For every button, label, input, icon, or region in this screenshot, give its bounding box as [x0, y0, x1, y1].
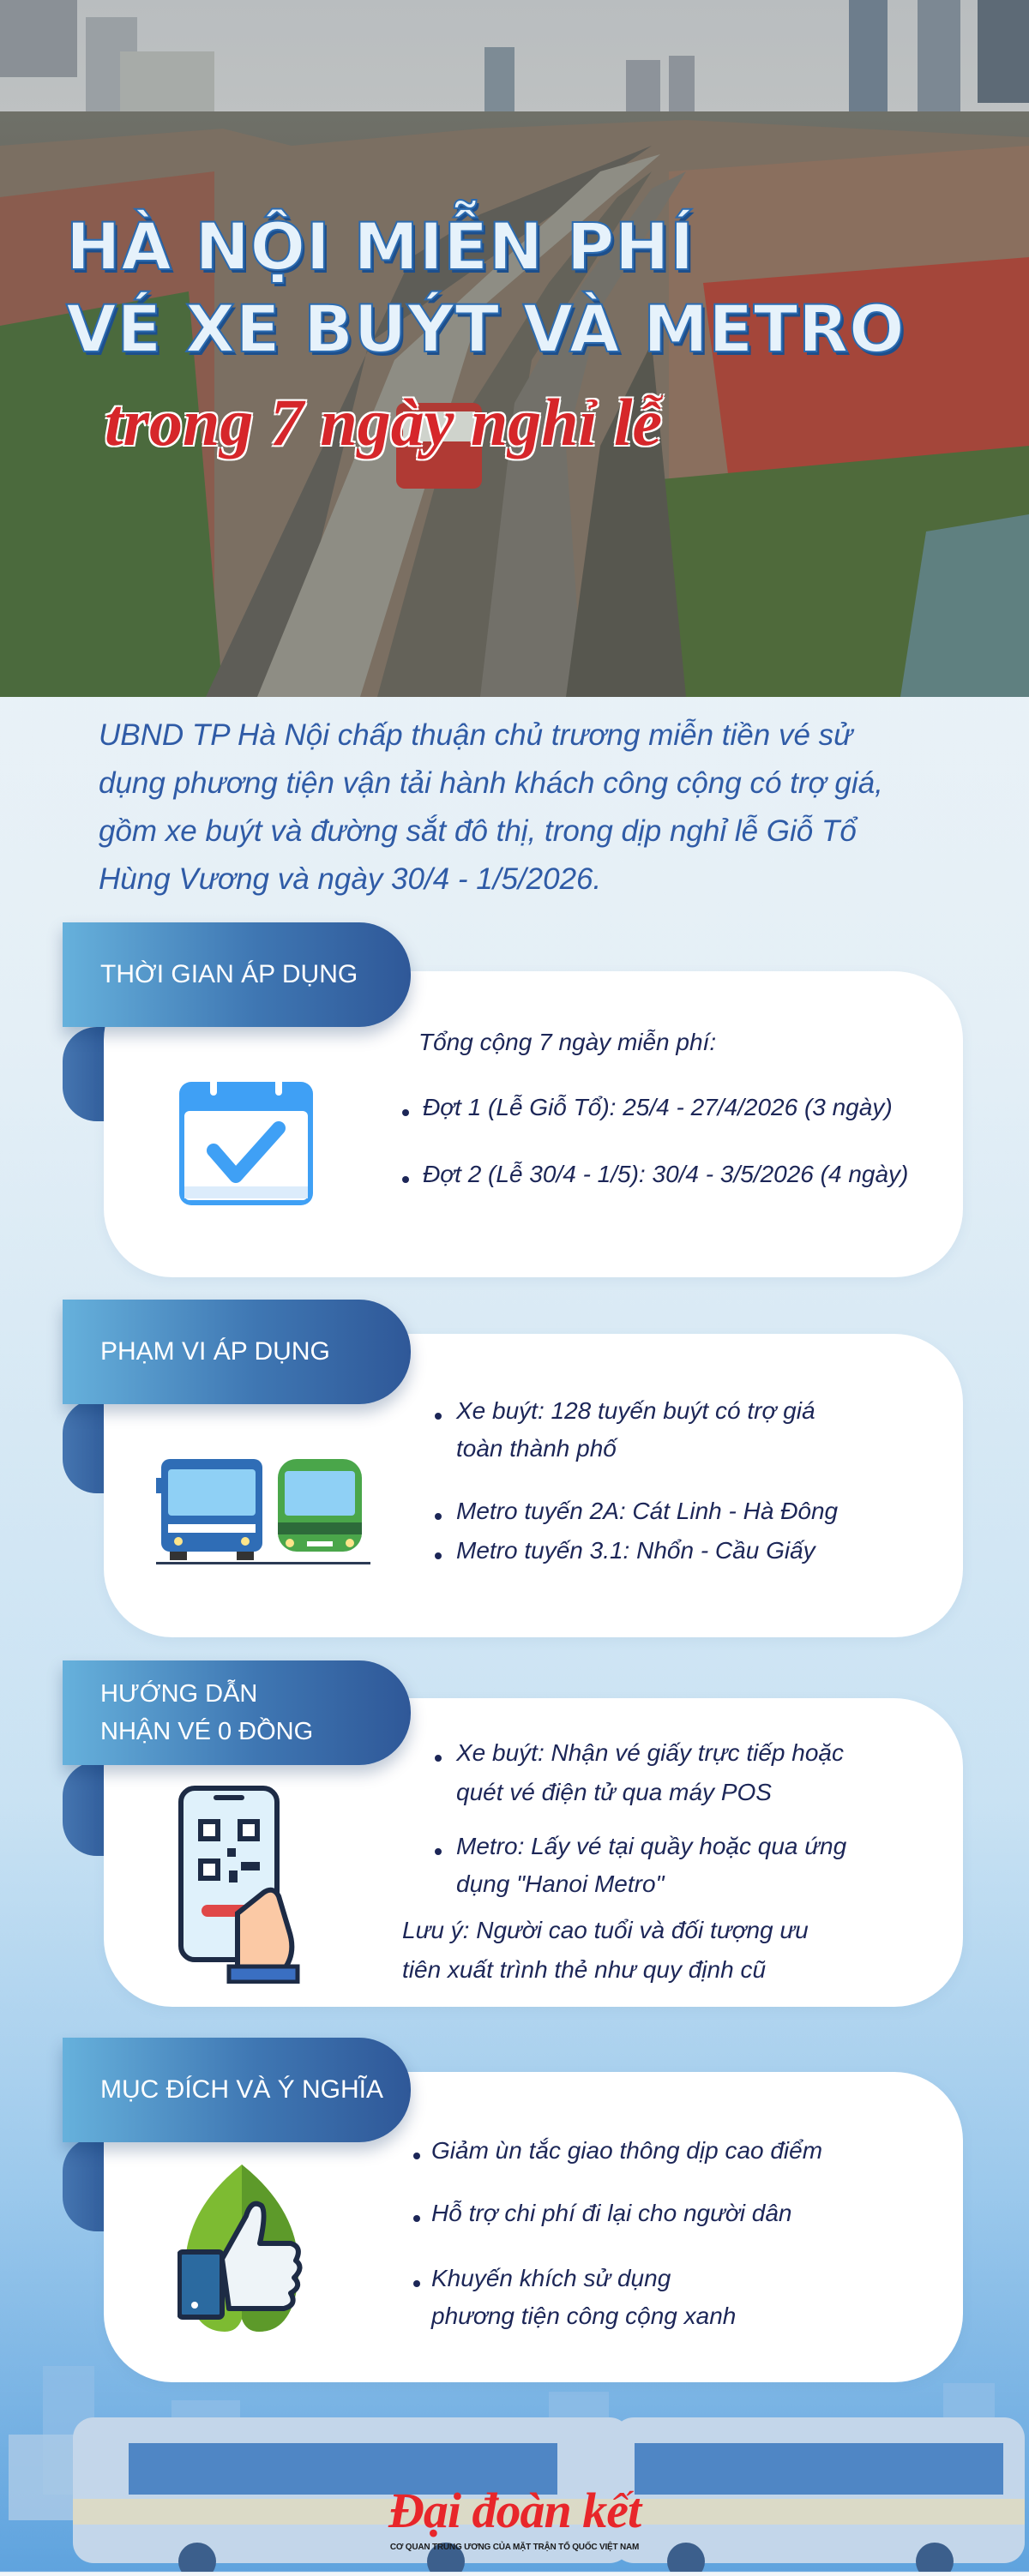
- header photo: [0, 0, 1029, 697]
- heading: hướng dẫn nhận vé 0 đồng: [63, 1660, 411, 1765]
- heading: mục đích và ý nghĩa: MỤC ĐÍCH VÀ Ý NGHĨA: [100, 2075, 383, 2104]
- heading: hướng dẫn nhận vé 0 đồng: HƯỚNG DẪN: [100, 1680, 257, 1708]
- panel: hướng dẫn nhận vé: [55, 1660, 963, 2007]
- text block: purposes: phương tiện công cộng xanh: [431, 2303, 736, 2329]
- text block: purposes: Khuyến khích sử dụng: [431, 2265, 671, 2291]
- text block: dates: Tổng cộng 7 ngày miễn phí:: [418, 1029, 716, 1055]
- text block: instructions: dụng "Hanoi Metro": [456, 1870, 664, 1897]
- title: [65, 199, 905, 367]
- logo: Đại đoàn kết: Đại đoàn kết: [388, 2483, 641, 2538]
- footer city and buses illustration: [9, 2366, 1025, 2572]
- text block: instructions: tiên xuất trình thẻ như quy định cũ: [402, 1956, 766, 1983]
- intro text: UBND TP Hà Nội chấp thuận chủ trương miễn tiền vé sử dụng phương tiện vận tải hành khách công cộng có trợ giá, gồm xe buýt và đường sắt đô thị, trong dịp nghỉ lễ Giỗ Tổ Hùng Vương và ngày 30/4 - 1/5/2026.: [99, 718, 883, 896]
- icon: bus and metro: [156, 1459, 370, 1564]
- text block: instructions: Lưu ý: Người cao tuổi và đối tượng ưu: [402, 1917, 809, 1943]
- logo: Đại đoàn kết: CƠ QUAN TRUNG ƯƠNG CỦA MẶT TRẬN TỔ QUỐC VIỆT NAM: [390, 2543, 639, 2552]
- text block: purposes: Giảm ùn tắc giao thông dịp cao điểm: [431, 2137, 822, 2164]
- text block: routes: Metro tuyến 3.1: Nhổn - Cầu Giấy: [456, 1537, 815, 1564]
- panel: thời gian áp dụng: [55, 922, 963, 1279]
- heading: mục đích và ý nghĩa: [63, 2038, 411, 2142]
- text block: instructions: Xe buýt: Nhận vé giấy trực tiếp hoặc: [456, 1739, 844, 1766]
- icon: thumbs up: [178, 2165, 303, 2332]
- panel: phạm vi áp dụng: [55, 1300, 963, 1637]
- text block: purposes: [413, 2137, 822, 2329]
- text block: instructions: [402, 1739, 846, 1983]
- text block: dates: [402, 1029, 908, 1187]
- title: HÀ NỘI MIỄN PHÍ: [66, 208, 695, 285]
- heading: thời gian áp dụng: THỜI GIAN ÁP DỤNG: [100, 960, 358, 988]
- heading: phạm vi áp dụng: PHẠM VI ÁP DỤNG: [100, 1337, 330, 1366]
- heading: phạm vi áp dụng: [63, 1300, 411, 1404]
- text block: instructions: Metro: Lấy vé tại quầy hoặc qua ứng: [456, 1833, 846, 1859]
- text block: routes: toàn thành phố: [456, 1435, 617, 1462]
- text block: routes: Metro tuyến 2A: Cát Linh - Hà Đông: [456, 1498, 838, 1524]
- panel: mục đích và ý nghĩa: [55, 2038, 963, 2382]
- icon: phone with QR: [178, 1786, 300, 1984]
- text block: routes: Xe buýt: 128 tuyến buýt có trợ giá: [456, 1397, 815, 1424]
- text block: dates: Đợt 2 (Lễ 30/4 - 1/5): 30/4 - 3/5/2026 (4 ngày): [423, 1161, 908, 1187]
- heading: hướng dẫn nhận vé 0 đồng: NHẬN VÉ 0 ĐỒNG: [100, 1718, 313, 1745]
- text block: dates: Đợt 1 (Lễ Giỗ Tổ): 25/4 - 27/4/2026 (3 ngày): [423, 1094, 893, 1120]
- title: VÉ XE BUÝT VÀ METRO: [66, 291, 905, 367]
- heading: thời gian áp dụng: [63, 922, 411, 1027]
- icon: calendar: [179, 1082, 313, 1205]
- subtitle: trong 7 ngày nghỉ lễ: trong 7 ngày nghỉ lễ: [105, 385, 662, 459]
- text block: purposes: Hỗ trợ chi phí đi lại cho người dân: [431, 2200, 791, 2226]
- text block: routes: [435, 1397, 838, 1564]
- text block: instructions: quét vé điện tử qua máy POS: [456, 1779, 772, 1805]
